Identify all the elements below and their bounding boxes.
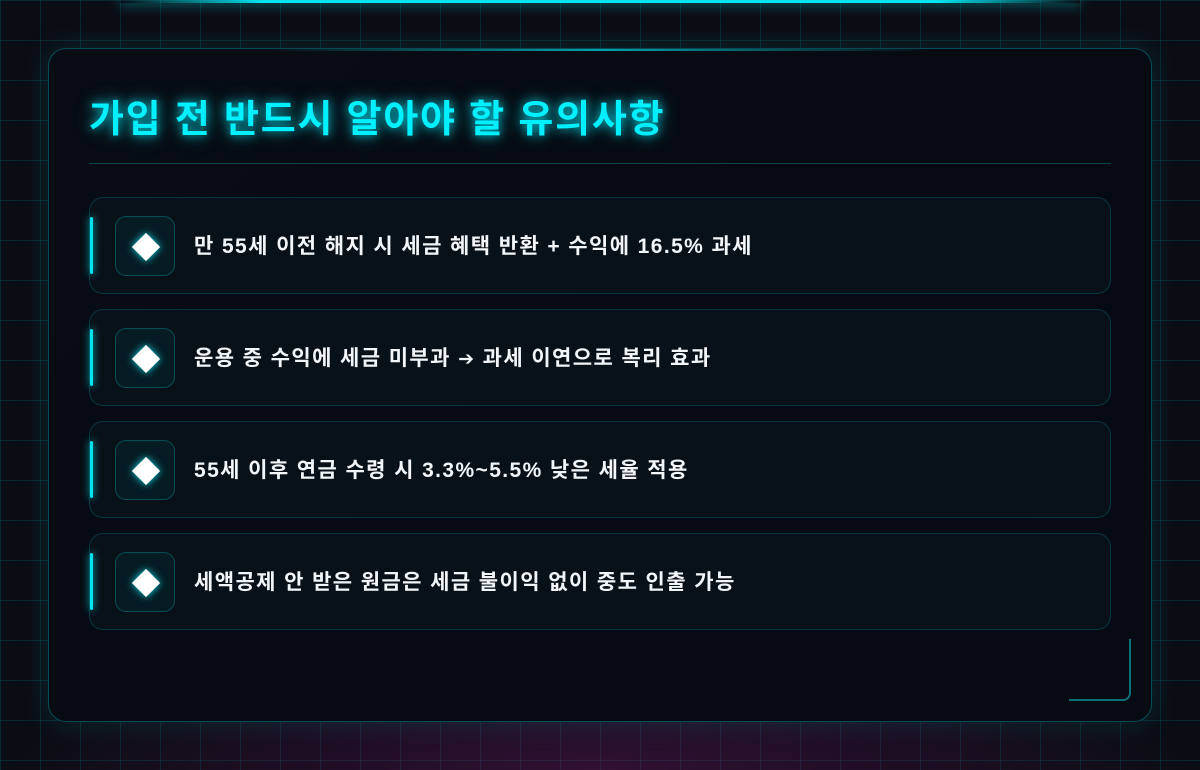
icon: diamond xyxy=(115,216,175,276)
item 2 xyxy=(89,309,1111,406)
item 4 xyxy=(89,533,1111,630)
text: 운용 중 수익에 세금 미부과 ➔ 과세 이연으로 복리 효과 xyxy=(194,347,712,370)
title: 가입 전 반드시 알아야 할 유의사항 xyxy=(89,99,665,141)
icon: diamond xyxy=(115,552,175,612)
corner bracket decoration xyxy=(1069,639,1131,701)
item 1 xyxy=(89,197,1111,294)
icon: diamond xyxy=(115,440,175,500)
item 3 xyxy=(89,421,1111,518)
icon: diamond xyxy=(115,328,175,388)
text: 만 55세 이전 해지 시 세금 혜택 반환 + 수익에 16.5% 과세 xyxy=(194,235,753,258)
text: 세액공제 안 받은 원금은 세금 불이익 없이 중도 인출 가능 xyxy=(194,571,736,594)
text: 55세 이후 연금 수령 시 3.3%~5.5% 낮은 세율 적용 xyxy=(194,459,689,482)
